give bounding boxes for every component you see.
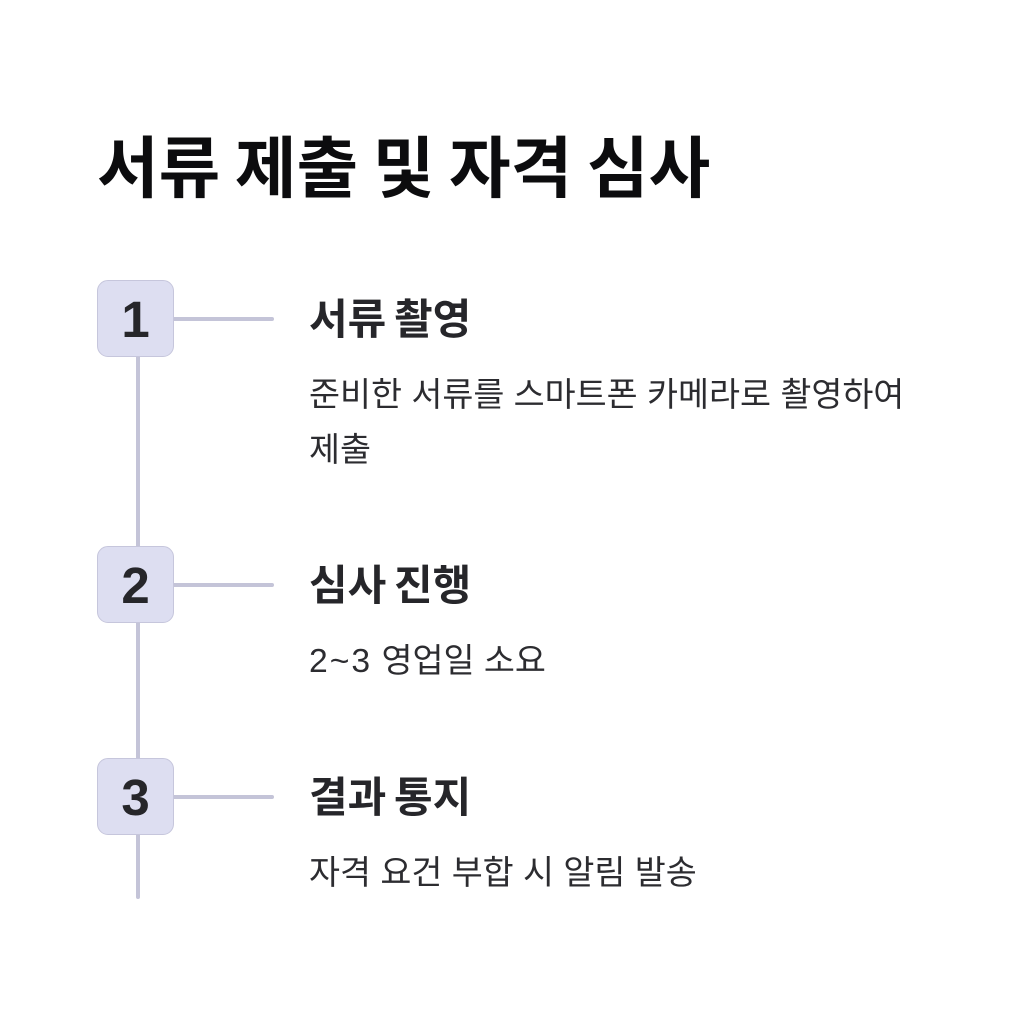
step 2 heading: 심사 진행 bbox=[309, 562, 471, 609]
step 3 description: 자격 요건 부합 시 알림 발송 bbox=[309, 854, 697, 892]
step 3 heading: 결과 통지 bbox=[309, 774, 471, 821]
step 1 description: 제출 bbox=[309, 431, 371, 469]
connector 1 bbox=[170, 317, 274, 321]
step 3 number badge: 3 bbox=[121, 769, 150, 826]
step 1 description bbox=[309, 376, 904, 469]
title: 서류 제출 및 자격 심사 bbox=[97, 132, 710, 207]
step 1 number badge: 1 bbox=[121, 291, 150, 348]
step 1 number badge bbox=[97, 280, 174, 357]
step 2 number badge: 2 bbox=[121, 557, 150, 614]
step 2 number badge bbox=[97, 546, 174, 623]
step 3 number badge bbox=[97, 758, 174, 835]
timeline vertical line bbox=[136, 350, 140, 899]
connector 2 bbox=[170, 583, 274, 587]
step 2 description: 2~3 영업일 소요 bbox=[309, 642, 546, 680]
step 1 description: 준비한 서류를 스마트폰 카메라로 촬영하여 bbox=[309, 376, 904, 414]
step 1 heading: 서류 촬영 bbox=[309, 296, 471, 343]
connector 3 bbox=[170, 795, 274, 799]
